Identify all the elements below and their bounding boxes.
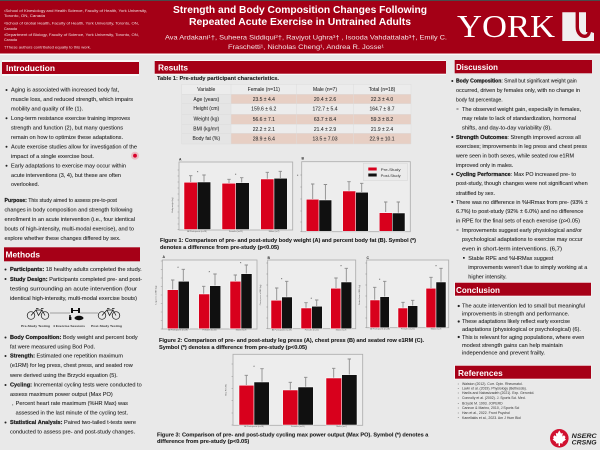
chart: figure 2C seated row: C [366, 256, 370, 260]
conclusion bullets: These adaptations likely reflect early exercise [462, 319, 570, 325]
conclusion bullets: independence and prevent frailty. [462, 351, 545, 357]
heading: methods [4, 247, 140, 261]
chart: figure 2A leg press: * [177, 265, 179, 270]
York U logo: YORK [457, 8, 555, 44]
purpose statement: Purpose: This study aimed to assess pre-to-post [4, 198, 117, 204]
study participants and design: Participants: 18 healthy adults completed the study. [10, 267, 142, 273]
chart: figure 2A leg press [156, 255, 257, 332]
chart: figure 2A leg press: Males (n=7) [236, 330, 247, 332]
chart: figure 1A body weight: A [179, 158, 182, 162]
figure 3 caption: Figure 3: Comparison of pre- and post-study cycling max power output (Max PO). Symbol (*) denotes a [157, 432, 428, 438]
chart: figure 1A body weight: Body weight (kg) [171, 197, 174, 212]
discussion bullets: Stable RPE and %HRMax suggest [468, 256, 554, 262]
chart: figure 2B chest press: Females (n=11) [305, 329, 319, 331]
discussion bullets: in RPE for the final sets of each exercise (p>0.05) [456, 218, 580, 224]
purpose statement: enrollment in an acute intervention (i.e., four identical [4, 217, 135, 223]
reference list: Cannon & Marino, 2010, J Sports Sci [462, 406, 520, 410]
panel: methods [4, 247, 142, 436]
heading: conclusion: Conclusion [456, 285, 500, 295]
table heading: Table 1: Pre-study participant characteristics. [157, 76, 280, 82]
chart: figure 2A leg press: * [240, 260, 242, 265]
figure 3 caption [157, 432, 428, 445]
chart: figure 2A leg press: * [209, 269, 211, 274]
discussion bullets: stratified by sex. [456, 191, 495, 197]
panel: conclusion [454, 282, 591, 357]
figure 1 caption: Figure 1: Comparison of pre- and post-study body weight (A) and percent body fat (B). Symbol (*) [160, 238, 416, 244]
figure 1 caption [160, 238, 416, 251]
purpose statement: bouts of high-intensity, multi-modal exercise), and to [4, 226, 134, 232]
NSERC CRSNG logo: CRSNG [572, 439, 597, 446]
table: participant characteristics: Female (n=11) [248, 87, 280, 93]
reference list: Hanlis and Nabavizadeh (2021). Exp. Gerontol. [462, 391, 534, 395]
title: Strength and Body Composition Changes Following [173, 5, 427, 16]
discussion bullets: Strength Outcomes : Strength improved across all [456, 135, 581, 141]
figure 3 caption: difference from pre-study (p<0.05) [157, 439, 250, 445]
table: participant characteristics: Weight (kg) [194, 116, 219, 122]
chart: figure 2C seated row: Females (n=11) [401, 329, 415, 331]
discussion bullets: body fat percentage. [456, 98, 503, 104]
affiliations: Toronto, ON, Canada [4, 14, 45, 18]
legend [363, 163, 407, 181]
chart: figure 3 cycling max power output: Females (n=11) [291, 426, 305, 428]
introduction bullets: Aging is associated with increased body fat, [11, 88, 120, 94]
reference list: Lavin et al. (2019). Physiology (Bethesda). [462, 387, 527, 391]
conclusion bullets: adaptations (physiological or psychological) (6). [462, 327, 581, 333]
heading: discussion: Discussion [456, 62, 498, 72]
methods bullets: (e1RM) for leg press, chest press, and seated row [10, 363, 133, 369]
discussion bullets: Improvements suggest early physiological and/or [462, 228, 582, 234]
table: participant characteristics: 21.9 ± 2.4 [371, 127, 393, 133]
chart: figure 1B body fat [297, 156, 410, 232]
reference list: Han et al., 2022. Front Psychol [462, 411, 510, 415]
methods bullets: Body Composition: Body weight and percent body [10, 335, 138, 341]
table: participant characteristics: Total (n=18) [369, 87, 396, 93]
methods bullets [4, 335, 142, 436]
reference list [458, 382, 534, 420]
chart: figure 2B chest press: * [340, 263, 342, 268]
reference list: Brzycki M. 1993. JOPERD [462, 401, 503, 405]
discussion bullets: even in short-term interventions. (6,7) [462, 246, 562, 252]
introduction bullets: strength and function (2), but many questions [11, 126, 123, 132]
discussion bullets: were seen in both sexes, while seated row e1RM [455, 154, 574, 160]
methods bullets: assessed in the last minute of the cycling test. [16, 410, 128, 416]
study participants and design: Study Design: Participants completed pre- and post- [10, 277, 142, 283]
panel: introduction [2, 60, 139, 242]
chart: figure 3 cycling max power output: All Participants (n=18) [244, 425, 264, 428]
methods bullets: assess maximum power output (Max PO) [10, 392, 113, 398]
table: participant characteristics: 59.3 ± 8.2 [371, 117, 393, 123]
chart: figure 1A body weight: Males (n=7) [269, 231, 280, 233]
methods bullets: Strength: Estimated one repetition maximum [10, 354, 124, 360]
chart: figure 2B chest press: Chest press e1RM (kg) [259, 284, 262, 305]
introduction bullets: impact of a single exercise bout. [11, 154, 94, 160]
discussion bullets: shifts, and day-to-day variability (8). [462, 126, 552, 132]
table: participant characteristics: 164.7 ± 8.7 [370, 106, 395, 112]
chart: figure 2C seated row: * [379, 277, 381, 282]
introduction bullets [6, 88, 137, 188]
chart: figure 2B chest press: * [311, 296, 313, 301]
reference list: Connolly et al. (2002). J. Sports Sci. Med. [462, 396, 526, 400]
discussion bullets: 6.7%) to post-study (92% ± 6.0%) and no difference [456, 209, 583, 215]
discussion bullets: exercises; improvements in leg press and chest press [456, 144, 587, 150]
heading: introduction: Introduction [6, 63, 55, 73]
chart: figure 3 cycling max power output: Max PO (W) [226, 384, 228, 396]
title [173, 5, 427, 28]
methods bullets: Cycling: Incremental cycling tests were conducted to [10, 382, 142, 388]
study timeline diagram [21, 308, 122, 328]
figure 1 caption: denotes a difference from pre-study (p<0.05) [160, 245, 279, 251]
heading: references: References [458, 368, 503, 378]
table: participant characteristics: BMI (kg/m²) [193, 126, 220, 132]
chart: figure 2B chest press [259, 256, 356, 331]
table: participant characteristics: 23.5 ± 4.4 [253, 97, 275, 103]
affiliations: Canada [4, 27, 17, 31]
timeline labels: 4 Exercise Sessions [53, 324, 86, 328]
chart: figure 2A leg press: Leg press e1RM (kg) [156, 285, 158, 304]
conclusion bullets: This is relevant for aging populations, where even [462, 335, 584, 341]
study participants and design: identical high-intensity, multi-modal exercise bouts) [10, 296, 137, 302]
heading: results: Results [158, 62, 188, 72]
authors: Fraschetti¹, Nicholas Cheng¹, Andrea R. Josse¹ [228, 44, 385, 51]
table: participant characteristics: Body fat (%) [193, 136, 220, 142]
pointer dot [131, 152, 139, 160]
introduction bullets: Long-term resistance exercise training improves [11, 116, 130, 122]
conclusion bullets [458, 304, 585, 357]
discussion bullets: post-study, though changes were not significant when [456, 181, 588, 187]
introduction bullets: mobility and quality of life (1). [11, 106, 83, 112]
chart: figure 2A leg press: A [162, 255, 166, 259]
table: participant characteristics: Male (n=7) [313, 87, 337, 93]
table: participant characteristics: 21.4 ± 2.9 [314, 127, 336, 133]
chart: figure 3 cycling max power output: Males (n=7) [336, 426, 347, 428]
discussion bullets: There was no difference in %HRmax from pre- (93% ± [456, 200, 588, 206]
discussion bullets: higher intensity. [468, 274, 507, 280]
introduction bullets: Early adaptations to exercise may occur within [11, 164, 126, 170]
chart: figure 2C seated row: * [435, 263, 437, 268]
affiliations [4, 9, 147, 50]
legend: Pre-Study [381, 168, 401, 172]
NSERC CRSNG logo [550, 429, 597, 448]
chart: figure 1A body weight [171, 158, 293, 233]
discussion bullets: may relate to lack of standardization, hormonal [462, 116, 576, 122]
methods bullets: Percent heart rate maximum (%HR Max) was [16, 401, 128, 407]
timeline labels: Post-Study Testing [91, 324, 122, 328]
chart: figure 2B chest press: B [268, 256, 270, 260]
introduction bullets: remain on how to optimize these adaptations. [11, 135, 123, 141]
chart: figure 1A body weight: Females (n=11) [229, 231, 243, 233]
discussion bullets: Body Composition: Small but significant weight gain [456, 78, 577, 84]
affiliations: ³Department of Biology, Faculty of Science, York University, Toronto, ON, [4, 33, 139, 37]
figure 2 caption: Symbol (*) denotes a difference from pre-study (p<0.05) [159, 345, 307, 351]
chart: figure 3 cycling max power output [226, 354, 363, 428]
methods bullets: fat were measured using Bod Pod. [10, 344, 95, 350]
table: participant characteristics: 28.9 ± 6.4 [253, 137, 275, 143]
purpose statement [4, 198, 135, 242]
introduction bullets: overlooked. [11, 182, 39, 188]
chart: figure 2B chest press: All Participants (n=18) [272, 328, 292, 331]
heading: references [454, 365, 591, 380]
reference list: Kanellakis et al., 2023. Am J Hum Biol [462, 416, 521, 420]
table: participant characteristics [182, 84, 411, 144]
purpose statement: explore whether these changes differed by sex. [4, 236, 120, 242]
chart: figure 1B body fat: * [297, 173, 299, 178]
chart: figure 2A leg press: All Participants (n=18) [168, 329, 188, 332]
affiliations: Canada [4, 38, 17, 42]
methods bullets: conducted to assess pre- and post-study changes. [10, 430, 135, 436]
chart: figure 1B body fat: B [302, 156, 304, 160]
figure 2 caption [159, 338, 425, 351]
table: participant characteristics: 22.9 ± 10.1 [370, 137, 395, 143]
heading: introduction [2, 60, 139, 76]
panel: discussion [451, 60, 592, 280]
chart: figure 2B chest press: * [281, 276, 283, 281]
study participants and design: testing surrounding an acute intervention (four [10, 286, 137, 292]
discussion bullets: improvements weren’t due to simply working at a [468, 265, 587, 271]
discussion bullets: The observed weight gain, especially in females, [462, 107, 582, 113]
chart: figure 2C seated row: Seated row e1RM (kg) [358, 285, 361, 305]
chart: figure 1A body weight: * [197, 170, 199, 174]
figure 2 caption: Figure 2: Comparison of pre- and post-study leg press (A), chest press (B) and seated row e1RM (C). [159, 338, 425, 344]
discussion bullets [451, 78, 588, 280]
study participants and design [4, 267, 142, 302]
icon: post-study bike [98, 308, 120, 319]
introduction bullets: muscle loss, and reduced strength, which impairs [11, 97, 133, 103]
NSERC CRSNG logo: NSERC [572, 433, 597, 440]
chart: figure 2C seated row [358, 256, 449, 331]
reference list: Walston (2012). Curr. Opin. Rheumatol. [462, 382, 523, 386]
discussion bullets: occurred, driven by females only, with no change in [456, 88, 580, 94]
discussion bullets: psychological adaptations to exercise may occur [462, 237, 583, 243]
methods bullets: were derived using the Brzycki equation (5). [9, 373, 118, 379]
table: participant characteristics: Age (years) [193, 97, 220, 103]
affiliations: †These authors contributed equally to this work. [4, 46, 91, 50]
chart: figure 1A body weight: * [235, 172, 237, 177]
authors [165, 35, 447, 51]
title: Repeated Acute Exercise in Untrained Adults [189, 17, 412, 28]
heading: results [155, 60, 446, 75]
chart: figure 2B chest press: Males (n=7) [336, 329, 347, 331]
conclusion bullets: modest strength gains can help maintain [462, 343, 563, 349]
conclusion bullets: The acute intervention led to small but meaningful [462, 304, 585, 310]
table: participant characteristics: 13.5 ± 7.03 [312, 137, 338, 143]
table: participant characteristics: 56.6 ± 7.1 [253, 117, 275, 123]
panel: references [454, 365, 597, 448]
heading: discussion [455, 60, 592, 73]
legend: Post-Study [381, 174, 401, 178]
affiliations: ²School of Global Health, Faculty of Health, York University, Toronto, ON, [4, 22, 139, 26]
chart: figure 2C seated row: Males (n=7) [431, 329, 442, 331]
icon: pre-study bike [27, 308, 49, 319]
heading: methods: Methods [6, 250, 40, 260]
methods bullets: Statistical Analysis: Paired two-tailed t-tests were [10, 420, 136, 426]
conclusion bullets: improvements in strength and performance. [462, 311, 570, 317]
discussion bullets: improved only in males. [456, 163, 513, 169]
table: participant characteristics: Variable [197, 87, 216, 93]
introduction bullets: Acute exercise studies allow for investigation of the [11, 144, 137, 150]
chart: figure 2C seated row: All Participants (n=18) [370, 328, 390, 331]
table: participant characteristics: 172.7 ± 5.4 [312, 106, 338, 112]
authors: Ava Ardakani¹†, Suheera Siddiqui²†, Ravjyot Ughra³† , Isooda Vahdattalab³†, Emily C. [165, 35, 447, 42]
icon: exercise sessions [69, 308, 84, 320]
table: participant characteristics: 159.6 ± 6.2 [251, 106, 277, 112]
table: participant characteristics: 22.2 ± 2.1 [253, 127, 275, 133]
table: participant characteristics: 20.4 ± 2.6 [314, 97, 336, 103]
chart: figure 2A leg press: Females (n=11) [203, 330, 217, 332]
discussion bullets: Cycling Performance: Max PO increased pre- to [456, 172, 576, 178]
affiliations: ¹School of Kinesiology and Health Science, Faculty of Health, York University, [4, 9, 147, 13]
header banner [0, 0, 600, 55]
panel: results [155, 60, 449, 445]
chart: figure 1A body weight: All Participants (n=18) [187, 230, 207, 233]
timeline labels: Pre-Study Testing [21, 324, 50, 328]
table: participant characteristics: 22.3 ± 4.0 [371, 97, 393, 103]
timeline labels [21, 324, 122, 328]
table: participant characteristics: 63.7 ± 8.4 [314, 117, 336, 123]
table: participant characteristics: Height (cm) [193, 106, 220, 112]
purpose statement: changes in body composition and strength following [4, 207, 132, 213]
chart: figure 3 cycling max power output: * [253, 364, 255, 369]
introduction bullets: acute interventions (3, 4), but these are often [11, 173, 121, 179]
York U logo [457, 8, 595, 44]
